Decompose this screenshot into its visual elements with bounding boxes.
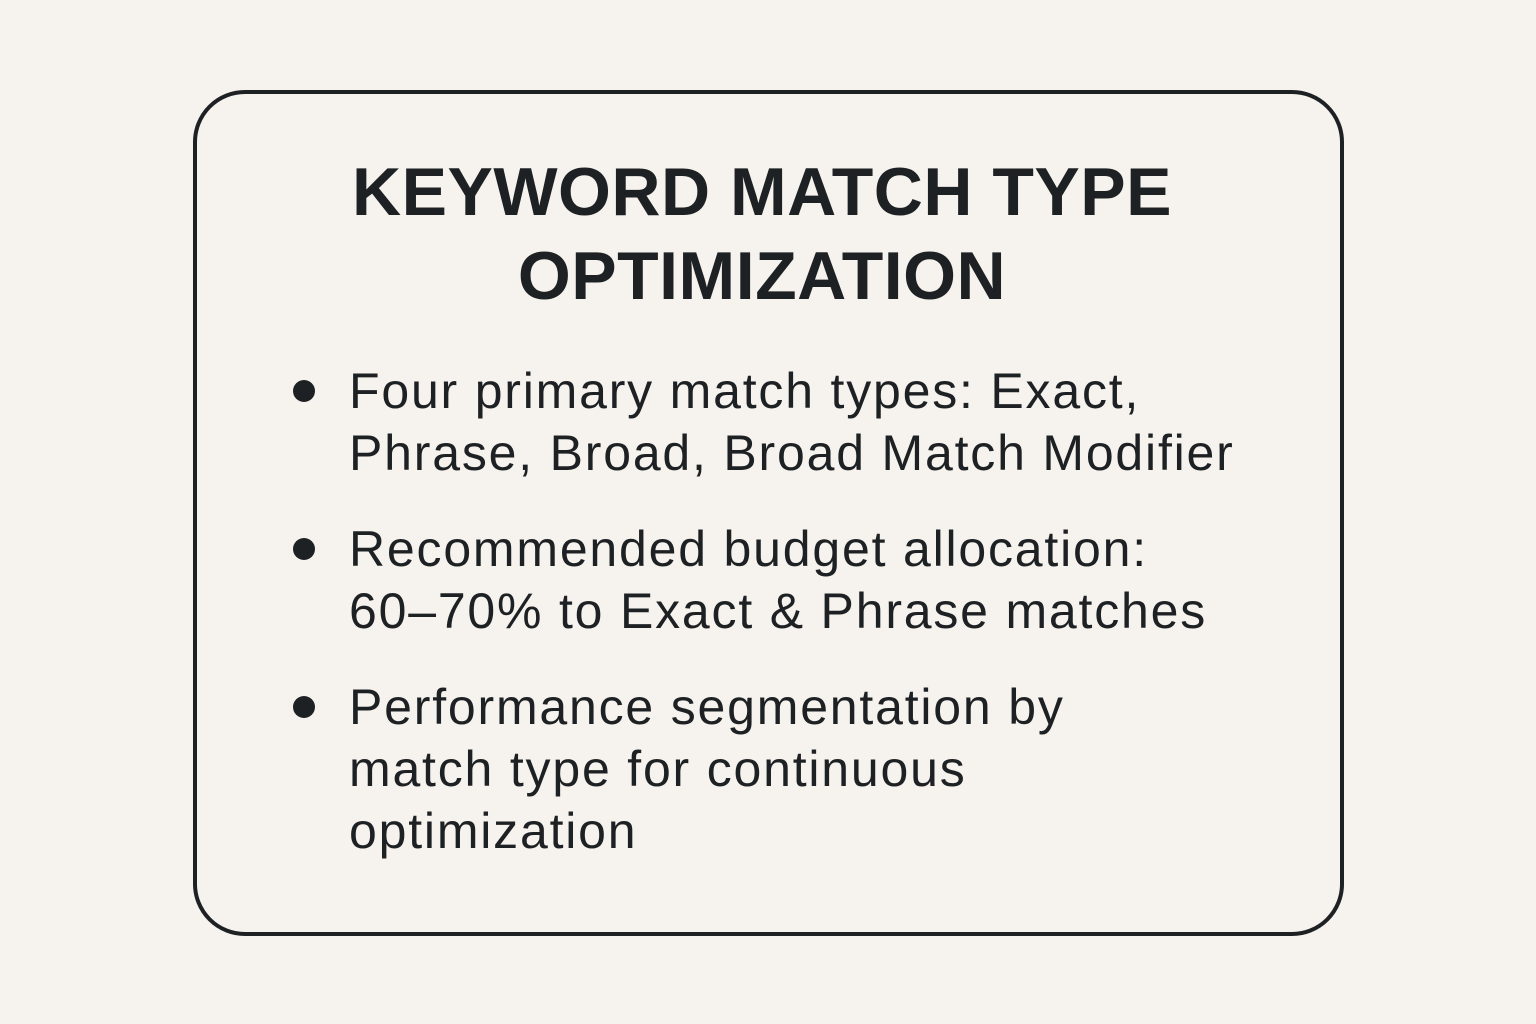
icon: bullet dot	[293, 380, 315, 402]
text: match types: Phrase, Broad, Broad Match Modifier	[349, 425, 1235, 481]
bullet: performance segmentation	[293, 679, 1065, 859]
text: match types	[349, 363, 1235, 481]
text: budget allocation	[349, 521, 1207, 639]
icon: bullet dot	[293, 538, 315, 560]
title	[352, 154, 1172, 314]
title: OPTIMIZATION	[518, 238, 1006, 314]
text: match types: Four primary match types: Exact,	[349, 363, 1140, 419]
bullet: match types	[293, 363, 1235, 481]
text: performance segmentation: optimization	[349, 803, 637, 859]
text: performance segmentation: match type for continuous	[349, 741, 967, 797]
text: performance segmentation	[349, 679, 1065, 859]
title: KEYWORD MATCH TYPE	[352, 154, 1172, 230]
icon: bullet dot	[293, 696, 315, 718]
bullet: budget allocation	[293, 521, 1207, 639]
panel: card	[193, 90, 1344, 936]
text: budget allocation: 60–70% to Exact & Phrase matches	[349, 583, 1207, 639]
text: performance segmentation: Performance segmentation by	[349, 679, 1065, 735]
text: budget allocation: Recommended budget allocation:	[349, 521, 1148, 577]
